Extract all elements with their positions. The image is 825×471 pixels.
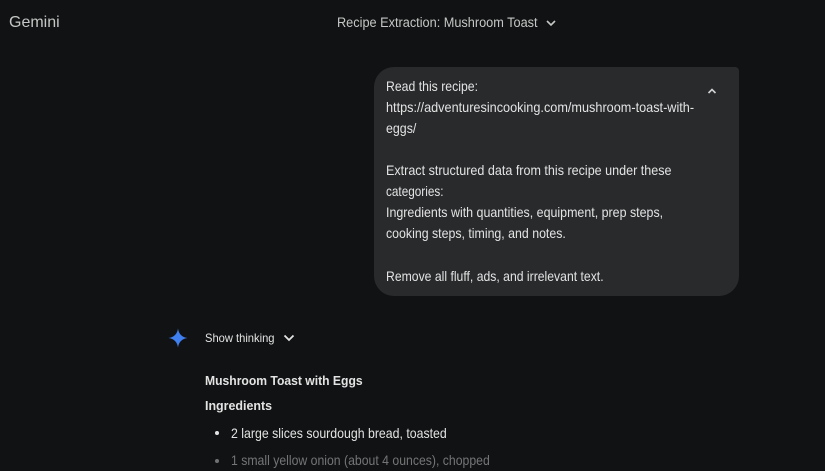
ingredient text 1: 2 large slices sourdough bread, toasted	[231, 425, 447, 441]
ingredient text 2: 1 small yellow onion (about 4 ounces), chopped	[231, 452, 490, 468]
icon: show thinking chevron	[284, 334, 294, 342]
ingredients heading: Ingredients	[205, 398, 272, 413]
prompt text: recipe url: Read this recipe:	[386, 78, 478, 94]
icon: title dropdown chevron	[546, 20, 556, 26]
panel: user prompt bubble	[374, 67, 739, 296]
conversation title: Recipe Extraction: Mushroom Toast	[337, 15, 538, 30]
logo: Gemini: Gemini	[9, 14, 60, 31]
prompt text: extraction instructions: cooking steps, timing, and notes.	[386, 225, 566, 241]
prompt text: recipe url: https://adventuresincooking.com/mushroom-toast-with-	[386, 99, 694, 115]
icon: collapse chevron	[708, 88, 716, 94]
prompt text: extraction instructions	[386, 162, 671, 241]
prompt text: recipe url	[386, 78, 694, 136]
prompt text: extraction instructions: Extract structured data from this recipe under these	[386, 162, 671, 178]
prompt text: extraction instructions: Ingredients with quantities, equipment, prep steps,	[386, 204, 663, 220]
show thinking label: Show thinking	[205, 331, 274, 345]
prompt text: cleanup instruction: Remove all fluff, ads, and irrelevant text.	[386, 268, 604, 284]
ingredient bullet 1	[215, 431, 219, 435]
ingredient bullet 2	[215, 459, 219, 463]
icon: Gemini spark	[168, 328, 188, 348]
prompt text: recipe url: eggs/	[386, 120, 416, 136]
prompt text: extraction instructions: categories:	[386, 183, 444, 199]
recipe heading: Mushroom Toast with Eggs	[205, 373, 363, 388]
